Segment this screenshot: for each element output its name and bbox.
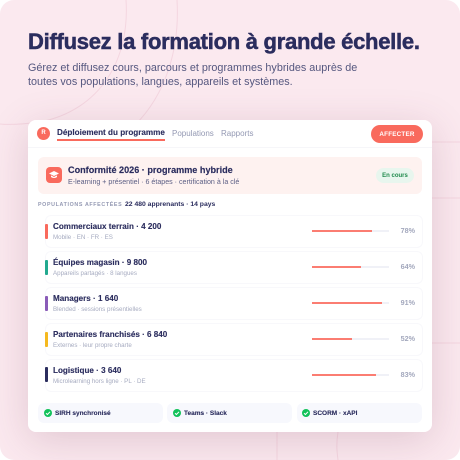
bar track <box>312 266 389 268</box>
card shadow <box>28 120 432 432</box>
icon: logo <box>37 127 50 140</box>
button: affecter <box>371 125 423 143</box>
icon: check <box>302 409 310 417</box>
bar fill <box>312 266 361 268</box>
row: commerciaux terrain <box>45 215 423 248</box>
icon: check <box>173 409 181 417</box>
icon: check <box>44 409 52 417</box>
panel: program card <box>28 120 432 432</box>
row label: Équipes magasin · 9 800 <box>53 258 147 267</box>
row label: Logistique · 3 640 <box>53 366 121 375</box>
chip text: SCORM · xAPI <box>313 410 357 417</box>
banner subtext: E-learning + présentiel · 6 étapes · certification à la clé <box>68 178 239 186</box>
bar track <box>312 230 389 232</box>
button: affecter: AFFECTER <box>379 131 415 138</box>
stripe <box>45 332 48 347</box>
bar fill <box>312 374 376 376</box>
percentage: 83% <box>401 370 415 379</box>
row: équipes magasin <box>45 251 423 284</box>
subtitle: toutes vos populations, langues, appareils et systèmes. <box>28 76 293 88</box>
tab: active: Déploiement du programme <box>57 128 165 137</box>
chip text: SIRH synchronisé <box>55 410 111 417</box>
icon: logo: R <box>41 130 46 136</box>
chip: scorm <box>297 403 422 423</box>
bar track <box>312 302 389 304</box>
chip text: Teams · Slack <box>184 410 227 417</box>
bar track <box>312 338 389 340</box>
subtitle: Gérez et diffusez cours, parcours et programmes hybrides auprès de <box>28 62 357 74</box>
chip: teams <box>167 403 292 423</box>
percentage: 91% <box>401 298 415 307</box>
chip: SIRH <box>38 403 163 423</box>
row label: Managers · 1 640 <box>53 294 118 303</box>
row detail: Blended · sessions présentielles <box>53 306 142 313</box>
row: managers <box>45 287 423 320</box>
stripe <box>45 260 48 275</box>
bar fill <box>312 302 382 304</box>
panel: programme banner <box>38 157 422 194</box>
row detail: Appareils partagés · 8 langues <box>53 270 137 277</box>
percentage: 52% <box>401 334 415 343</box>
bar track <box>312 374 389 376</box>
row: logistique <box>45 359 423 392</box>
row label: Partenaires franchisés · 6 840 <box>53 330 167 339</box>
bar fill <box>312 230 372 232</box>
populations total: 22 480 apprenants · 14 pays <box>125 201 215 208</box>
populations label: POPULATIONS AFFECTÉES <box>38 202 122 208</box>
title: Diffusez la formation à grande échelle. <box>28 29 420 54</box>
subtitle <box>28 62 357 88</box>
row detail: Externes · leur propre charte <box>53 342 132 349</box>
row detail: Microlearning hors ligne · PL · DE <box>53 378 146 385</box>
badge: en cours: En cours <box>382 173 408 179</box>
row: partenaires franchisés <box>45 323 423 356</box>
tab underline <box>57 139 165 140</box>
percentage: 64% <box>401 262 415 271</box>
badge: en cours <box>376 168 414 183</box>
percentage: 78% <box>401 226 415 235</box>
stripe <box>45 367 48 382</box>
tab bar divider <box>28 147 432 148</box>
row detail: Mobile · EN · FR · ES <box>53 234 113 241</box>
tab: rapports: Rapports <box>221 129 253 138</box>
tab: populations: Populations <box>172 129 214 138</box>
stripe <box>45 296 48 311</box>
icon: graduation cap <box>46 167 62 183</box>
row label: Commerciaux terrain · 4 200 <box>53 222 161 231</box>
stripe <box>45 224 48 239</box>
banner heading: Conformité 2026 · programme hybride <box>68 165 233 175</box>
bar fill <box>312 338 352 340</box>
